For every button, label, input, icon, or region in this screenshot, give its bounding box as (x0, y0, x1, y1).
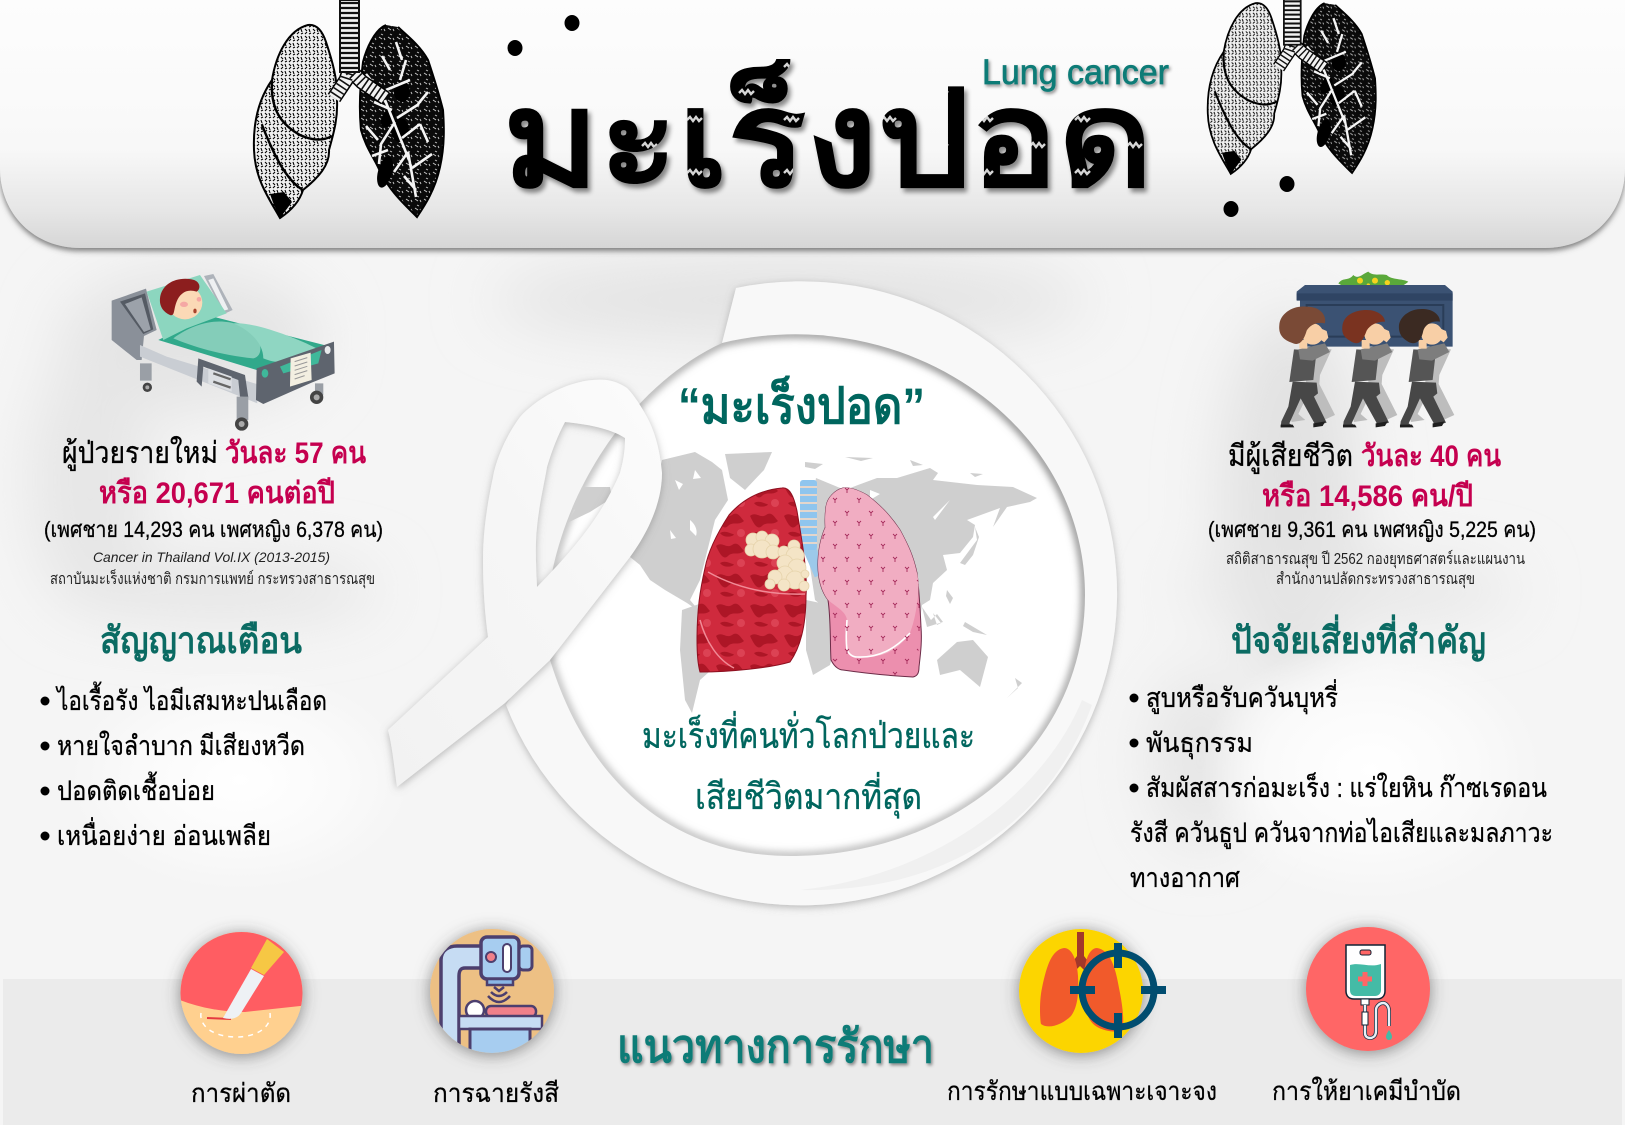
list: risk factors: สัมผัสสารก่อมะเร็ง : แร่ใยหิน ก๊าซเรดอน (1146, 770, 1547, 803)
trachea (800, 480, 820, 576)
decorative title dots (508, 15, 1294, 217)
icon: pallbearers carrying coffin (1279, 272, 1454, 427)
center white disc (547, 334, 1085, 856)
icon: chemotherapy IV bag (1306, 927, 1430, 1051)
stat text: new patients: หรือ 20,671 คนต่อปี (99, 477, 335, 510)
center caption: เสียชีวิตมากที่สุด (695, 772, 922, 819)
list: warning signs: ไอเรื้อรัง ไอมีเสมหะปนเลือด (55, 681, 327, 716)
list: warning signs: เหนื่อยง่าย อ่อนเพลีย (57, 817, 271, 851)
center caption (642, 711, 975, 819)
world map (566, 452, 1037, 713)
list: risk factors: รังสี ควันธูป ควันจากท่อไอเสียและมลภาวะ (1130, 818, 1553, 849)
center heading: “มะเร็งปอด” (678, 375, 925, 434)
ribbon ring (506, 281, 1117, 905)
icon: patient in hospital bed (112, 274, 335, 431)
heading: risk factors: ปัจจัยเสี่ยงที่สำคัญ (1231, 614, 1486, 662)
icon: engraved lungs right (1208, 0, 1376, 174)
stat text: deaths: วันละ 40 คน (1361, 440, 1501, 473)
title: มะเร็งปอด (503, 58, 1153, 215)
header banner (0, 0, 1625, 248)
stat text: new patients: Cancer in Thailand Vol.IX (2013-2015) (93, 549, 330, 565)
stat text: new patients: วันละ 57 คน (225, 437, 366, 470)
panel: treatment band background (3, 979, 1622, 1125)
list: warning signs: ปอดติดเชื้อบ่อย (57, 771, 215, 806)
list: warning signs (40, 681, 327, 851)
icon: radiation therapy machine (430, 929, 554, 1060)
stat text: deaths (1208, 440, 1536, 589)
stat text: new patients: ผู้ป่วยรายใหม่ (62, 436, 218, 471)
icon: engraved lungs left (254, 0, 444, 218)
stat text: deaths: สถิติสาธารณสุข ปี 2562 กองยุทธศาสตร์และแผนงาน (1226, 549, 1525, 569)
label: targeted therapy: การรักษาแบบเฉพาะเจาะจง (947, 1076, 1217, 1106)
list: warning signs: หายใจลำบาก มีเสียงหวีด (57, 730, 305, 761)
stat text: new patients: (เพศชาย 14,293 คน เพศหญิง 6,378 คน) (44, 517, 383, 542)
stat text: new patients (44, 436, 383, 589)
list: risk factors: พันธุกรรม (1146, 728, 1253, 760)
ribbon loop (388, 380, 662, 787)
icon: diseased red lung and healthy pink lung (697, 480, 921, 677)
list: risk factors: ทางอากาศ (1130, 863, 1240, 893)
label: chemotherapy: การให้ยาเคมีบำบัด (1272, 1076, 1461, 1106)
tumour (745, 531, 809, 591)
label: treatment heading: แนวทางการรักษา (617, 1020, 934, 1072)
list: risk factors (1130, 679, 1553, 893)
heading: warning signs: สัญญาณเตือน (100, 620, 302, 662)
stat text: deaths: สำนักงานปลัดกระทรวงสาธารณสุข (1276, 571, 1475, 589)
stat text: deaths: หรือ 14,586 คน/ปี (1262, 480, 1473, 513)
icon: targeted therapy lungs (1019, 929, 1166, 1053)
label: radiation: การฉายรังสี (433, 1078, 559, 1108)
label: surgery: การผ่าตัด (191, 1078, 291, 1108)
subtitle: Lung cancer: Lung cancer (982, 53, 1169, 92)
stat text: new patients: สถาบันมะเร็งแห่งชาติ กรมการแพทย์ กระทรวงสาธารณสุข (50, 568, 375, 589)
pink lung (818, 488, 921, 677)
stat text: deaths: (เพศชาย 9,361 คน เพศหญิง 5,225 คน) (1208, 517, 1536, 542)
icon: surgery scalpel (170, 932, 310, 1054)
red lung (697, 488, 806, 672)
stat text: deaths: มีผู้เสียชีวิต (1228, 440, 1353, 474)
list: risk factors: สูบหรือรับควันบุหรี่ (1146, 679, 1338, 715)
center caption: มะเร็งที่คนทั่วโลกป่วยและ (642, 711, 975, 756)
